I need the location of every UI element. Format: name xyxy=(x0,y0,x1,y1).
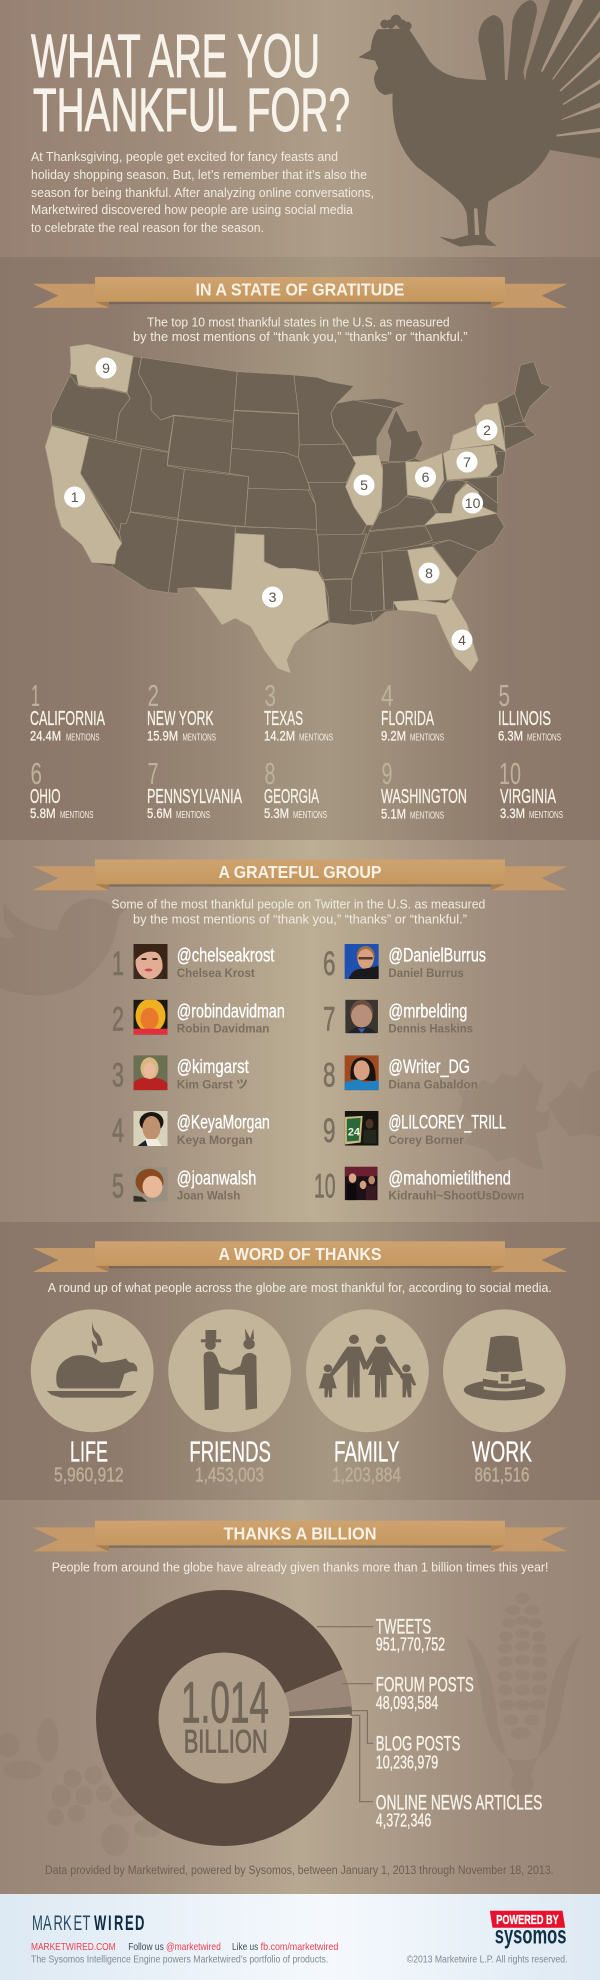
rank 1 california: CALIFORNIA xyxy=(30,708,105,730)
person 5 joanwalsh: @joanwalsh xyxy=(177,1168,256,1189)
rank 2 new york: NEW YORK xyxy=(147,708,214,730)
person 2 robindavidman: Robin Davidman xyxy=(177,1022,269,1036)
copyright: ©2013 Marketwire L.P. All rights reserved. xyxy=(407,1954,568,1965)
person 10 mahomietilthend: @mahomietilthend xyxy=(388,1168,511,1189)
intro text: season for being thankful. After analyzing online conversations, xyxy=(31,186,374,200)
person 1 chelseakrost: Chelsea Krost xyxy=(177,966,255,980)
rank 3 texas: MENTIONS xyxy=(299,732,333,744)
logo: powered by sysomos: POWERED BY xyxy=(496,1913,559,1927)
icon: turkey silhouette xyxy=(358,0,600,247)
rank 2 new york xyxy=(147,678,216,744)
rank 10 virginia: 10 xyxy=(499,756,521,791)
rank 3 texas: 14.2M xyxy=(264,728,295,744)
data source note: Data provided by Marketwired, powered by Sysomos, between January 1, 2013 through November 18, 2013. xyxy=(45,1865,554,1877)
map markers: 9 xyxy=(102,360,110,376)
icon: corn watermark xyxy=(465,1592,582,1795)
panel: in a state of gratitude xyxy=(0,257,600,840)
map markers: 3 xyxy=(269,589,277,605)
banner: a grateful group xyxy=(32,860,568,890)
rank 5 illinois: MENTIONS xyxy=(527,732,561,744)
person 9 lilcorey trill: 24 xyxy=(348,1127,360,1139)
logo: marketwired: MARKET xyxy=(32,1911,91,1935)
rank 2 new york: 15.9M xyxy=(147,728,178,744)
rank 2 new york: MENTIONS xyxy=(182,732,216,744)
category: family xyxy=(306,1309,429,1487)
intro text: At Thanksgiving, people get excited for fancy feasts and xyxy=(31,150,338,164)
icon: roast turkey on plate xyxy=(47,1322,137,1398)
rank 8 georgia: GEORGIA xyxy=(264,786,319,808)
intro text: to celebrate the real reason for the season. xyxy=(31,221,264,235)
person 5 joanwalsh xyxy=(112,1167,256,1206)
banner: a grateful group: A GRATEFUL GROUP xyxy=(218,862,382,882)
rank 9 washington: 5.1M xyxy=(381,806,406,822)
footer note: The Sysomos Intelligence Engine powers Marketwired’s portfolio of products. xyxy=(31,1954,328,1965)
map description: by the most mentions of “thank you,” “thanks” or “thankful.” xyxy=(133,330,468,344)
logo: powered by sysomos: sysomos xyxy=(495,1921,566,1949)
footer links xyxy=(31,1941,338,1953)
label: tweets xyxy=(376,1614,445,1655)
rank 8 georgia: MENTIONS xyxy=(293,810,327,821)
person 2 robindavidman: @robindavidman xyxy=(177,1001,285,1022)
map markers: 10 xyxy=(465,495,481,511)
person 4 keyamorgan: @KeyaMorgan xyxy=(177,1113,270,1134)
donut chart xyxy=(96,1590,352,1846)
panel: thanks a billion xyxy=(0,1500,600,1894)
rank 7 pennsylvania: 7 xyxy=(148,756,158,791)
map description: The top 10 most thankful states in the U.S. as measured xyxy=(147,316,450,330)
person 5 joanwalsh: Joan Walsh xyxy=(177,1189,240,1203)
rank 5 illinois xyxy=(498,678,561,744)
intro text xyxy=(31,150,374,235)
category: friends: 1,453,003 xyxy=(195,1465,264,1487)
rank 4 florida: 4 xyxy=(381,678,394,713)
rank 1 california: MENTIONS xyxy=(66,732,100,744)
person 4 keyamorgan: Keya Morgan xyxy=(177,1133,253,1147)
rank 5 illinois: 5 xyxy=(498,678,510,713)
person 8 writer dg xyxy=(323,1055,478,1094)
rank 4 florida: 9.2M xyxy=(381,728,406,744)
panel: intro xyxy=(0,0,600,257)
person 8 writer dg: @Writer_DG xyxy=(388,1057,470,1078)
person 7 mrbelding xyxy=(323,1000,473,1039)
person 3 kimgarst: 3 xyxy=(112,1056,124,1094)
person 6 danielburrus: @DanielBurrus xyxy=(388,946,486,967)
category: life: 5,960,912 xyxy=(54,1465,124,1487)
rank 5 illinois: 6.3M xyxy=(498,728,523,744)
billion description: People from around the globe have already given thanks more than 1 billion times this year! xyxy=(52,1561,548,1575)
person 1 chelseakrost xyxy=(112,944,275,983)
map: united states xyxy=(45,344,551,673)
rank 9 washington xyxy=(381,756,467,822)
label: online news articles xyxy=(376,1790,542,1831)
rank 10 virginia: VIRGINIA xyxy=(500,786,556,808)
rank 10 virginia: 3.3M xyxy=(500,806,525,821)
map markers xyxy=(64,358,497,650)
rank 6 ohio: OHIO xyxy=(30,786,60,808)
person 7 mrbelding: Dennis Haskins xyxy=(388,1022,473,1036)
banner: in a state of gratitude: IN A STATE OF GRATITUDE xyxy=(196,280,404,300)
person 9 lilcorey trill: @LILCOREY_TRILL xyxy=(388,1113,506,1134)
rank 10 virginia xyxy=(499,756,563,821)
map markers: 6 xyxy=(422,469,430,485)
title xyxy=(31,22,350,144)
rank 7 pennsylvania: PENNSYLVANIA xyxy=(147,786,242,808)
label: tweets: TWEETS xyxy=(376,1614,431,1638)
person 3 kimgarst xyxy=(112,1055,249,1094)
rank 6 ohio: MENTIONS xyxy=(60,810,94,821)
map markers: 2 xyxy=(483,422,491,438)
footer links: MARKETWIRED.COM xyxy=(31,1941,116,1953)
label: blog posts: 10,236,979 xyxy=(376,1752,438,1772)
group description xyxy=(111,898,485,926)
map markers: 7 xyxy=(463,454,471,470)
person 9 lilcorey trill xyxy=(323,1111,506,1150)
map description xyxy=(133,316,468,344)
rank 7 pennsylvania: 5.6M xyxy=(147,806,172,821)
rank 1 california xyxy=(30,678,105,744)
logo: marketwired: WIRED xyxy=(94,1911,144,1935)
donut chart: 1.014 xyxy=(181,1670,269,1735)
donut chart: BILLION xyxy=(184,1723,268,1759)
state rankings xyxy=(30,678,563,822)
title: WHAT ARE YOU xyxy=(31,22,320,90)
rank 4 florida: MENTIONS xyxy=(410,732,444,744)
label: forum posts: FORUM POSTS xyxy=(376,1673,474,1697)
category: life: LIFE xyxy=(70,1437,108,1469)
person 7 mrbelding: @mrbelding xyxy=(388,1001,467,1022)
rank 3 texas: 3 xyxy=(264,678,276,713)
group description: by the most mentions of “thank you,” “thanks” or “thankful.” xyxy=(133,912,467,926)
leader lines xyxy=(317,1627,373,1802)
label: forum posts: 48,093,584 xyxy=(376,1693,438,1713)
rank 1 california: 1 xyxy=(31,678,40,713)
person 9 lilcorey trill: Corey Borner xyxy=(388,1133,464,1147)
rank 6 ohio xyxy=(30,756,94,821)
rank 3 texas xyxy=(264,678,333,744)
banner: a word of thanks xyxy=(32,1241,568,1272)
icon: berries and leaves watermark xyxy=(0,1718,161,1856)
logo: powered by sysomos xyxy=(490,1911,566,1949)
category: friends xyxy=(168,1309,291,1487)
person 4 keyamorgan: 4 xyxy=(112,1112,124,1150)
rank 1 california: 24.4M xyxy=(30,728,61,744)
label: blog posts xyxy=(376,1732,460,1772)
person 2 robindavidman: 2 xyxy=(112,1001,124,1039)
rank 9 washington: WASHINGTON xyxy=(381,786,467,808)
person 5 joanwalsh: 5 xyxy=(112,1168,124,1206)
rank 7 pennsylvania xyxy=(147,756,242,821)
rank 6 ohio: 5.8M xyxy=(30,806,56,821)
rank 7 pennsylvania: MENTIONS xyxy=(176,810,210,821)
footer links: Follow us xyxy=(128,1941,164,1953)
banner: a word of thanks: A WORD OF THANKS xyxy=(218,1244,382,1264)
label: blog posts: BLOG POSTS xyxy=(376,1732,460,1756)
banner: thanks a billion: THANKS A BILLION xyxy=(224,1523,376,1543)
person 9 lilcorey trill: 9 xyxy=(323,1112,336,1150)
person 8 writer dg: 8 xyxy=(323,1056,336,1094)
icon: twitter bird watermark xyxy=(0,898,130,995)
group description: Some of the most thankful people on Twitter in the U.S. as measured xyxy=(111,898,485,912)
label: tweets: 951,770,752 xyxy=(376,1635,445,1655)
rank 8 georgia xyxy=(264,756,327,821)
person 8 writer dg: Diana Gabaldon xyxy=(388,1077,478,1091)
rank 6 ohio: 6 xyxy=(30,756,42,791)
map markers: 8 xyxy=(425,565,433,581)
person 1 chelseakrost: 1 xyxy=(112,945,124,983)
category: friends: FRIENDS xyxy=(189,1437,271,1469)
person 10 mahomietilthend: 10 xyxy=(314,1168,336,1206)
panel: a grateful group xyxy=(0,840,600,1222)
person 1 chelseakrost: @chelseakrost xyxy=(177,946,275,967)
logo: marketwired xyxy=(32,1911,144,1935)
panel: footer xyxy=(0,1894,600,1980)
map markers: 1 xyxy=(71,489,79,505)
banner: thanks a billion xyxy=(32,1521,568,1551)
rank 2 new york: 2 xyxy=(148,678,159,713)
rank 8 georgia: 8 xyxy=(264,756,276,791)
category: life xyxy=(31,1309,154,1487)
person 6 danielburrus: 6 xyxy=(323,945,336,983)
rank 9 washington: 9 xyxy=(382,756,392,791)
person 6 danielburrus: Daniel Burrus xyxy=(388,966,464,980)
panel: a word of thanks xyxy=(0,1222,600,1500)
rank 8 georgia: 5.3M xyxy=(264,806,289,821)
person 6 danielburrus xyxy=(323,944,486,983)
icon: pilgrim hat xyxy=(464,1336,545,1400)
category: work: WORK xyxy=(472,1437,532,1469)
category: family: FAMILY xyxy=(334,1437,400,1469)
footer links: Like us xyxy=(232,1941,258,1953)
banner: in a state of gratitude xyxy=(32,277,568,308)
title: THANKFUL FOR? xyxy=(33,76,350,144)
intro text: Marketwired discovered how people are using social media xyxy=(31,203,353,217)
rank 9 washington: MENTIONS xyxy=(410,810,444,822)
rank 3 texas: TEXAS xyxy=(264,708,303,730)
intro text: holiday shopping season. But, let’s remember that it’s also the xyxy=(31,168,367,182)
thanks description: A round up of what people across the globe are most thankful for, according to social media. xyxy=(48,1281,552,1295)
rank 4 florida: FLORIDA xyxy=(381,708,434,730)
person 10 mahomietilthend xyxy=(314,1167,524,1206)
person 4 keyamorgan xyxy=(112,1111,270,1150)
icon: leaves watermark xyxy=(457,1063,600,1170)
person 10 mahomietilthend: Kidrauhl~ShootUsDown xyxy=(388,1189,524,1203)
category: work xyxy=(443,1309,566,1487)
category: work: 861,516 xyxy=(474,1465,530,1487)
person 7 mrbelding: 7 xyxy=(323,1001,336,1039)
person 2 robindavidman xyxy=(112,999,285,1039)
map markers: 4 xyxy=(458,632,466,648)
label: forum posts xyxy=(376,1673,474,1713)
footer links: fb.com/marketwired xyxy=(261,1941,338,1953)
rank 10 virginia: MENTIONS xyxy=(529,810,563,821)
map markers: 5 xyxy=(360,477,368,493)
footer links: @marketwired xyxy=(166,1941,221,1953)
icon: family of four xyxy=(319,1335,416,1397)
person 3 kimgarst: Kim Garst ツ xyxy=(177,1077,248,1091)
label: online news articles: 4,372,346 xyxy=(376,1811,431,1831)
icon: pilgrim and native american handshake xyxy=(201,1328,257,1410)
rank 5 illinois: ILLINOIS xyxy=(498,708,551,730)
category: family: 1,203,884 xyxy=(332,1465,401,1487)
rank 4 florida xyxy=(381,678,444,744)
person 3 kimgarst: @kimgarst xyxy=(177,1057,249,1078)
